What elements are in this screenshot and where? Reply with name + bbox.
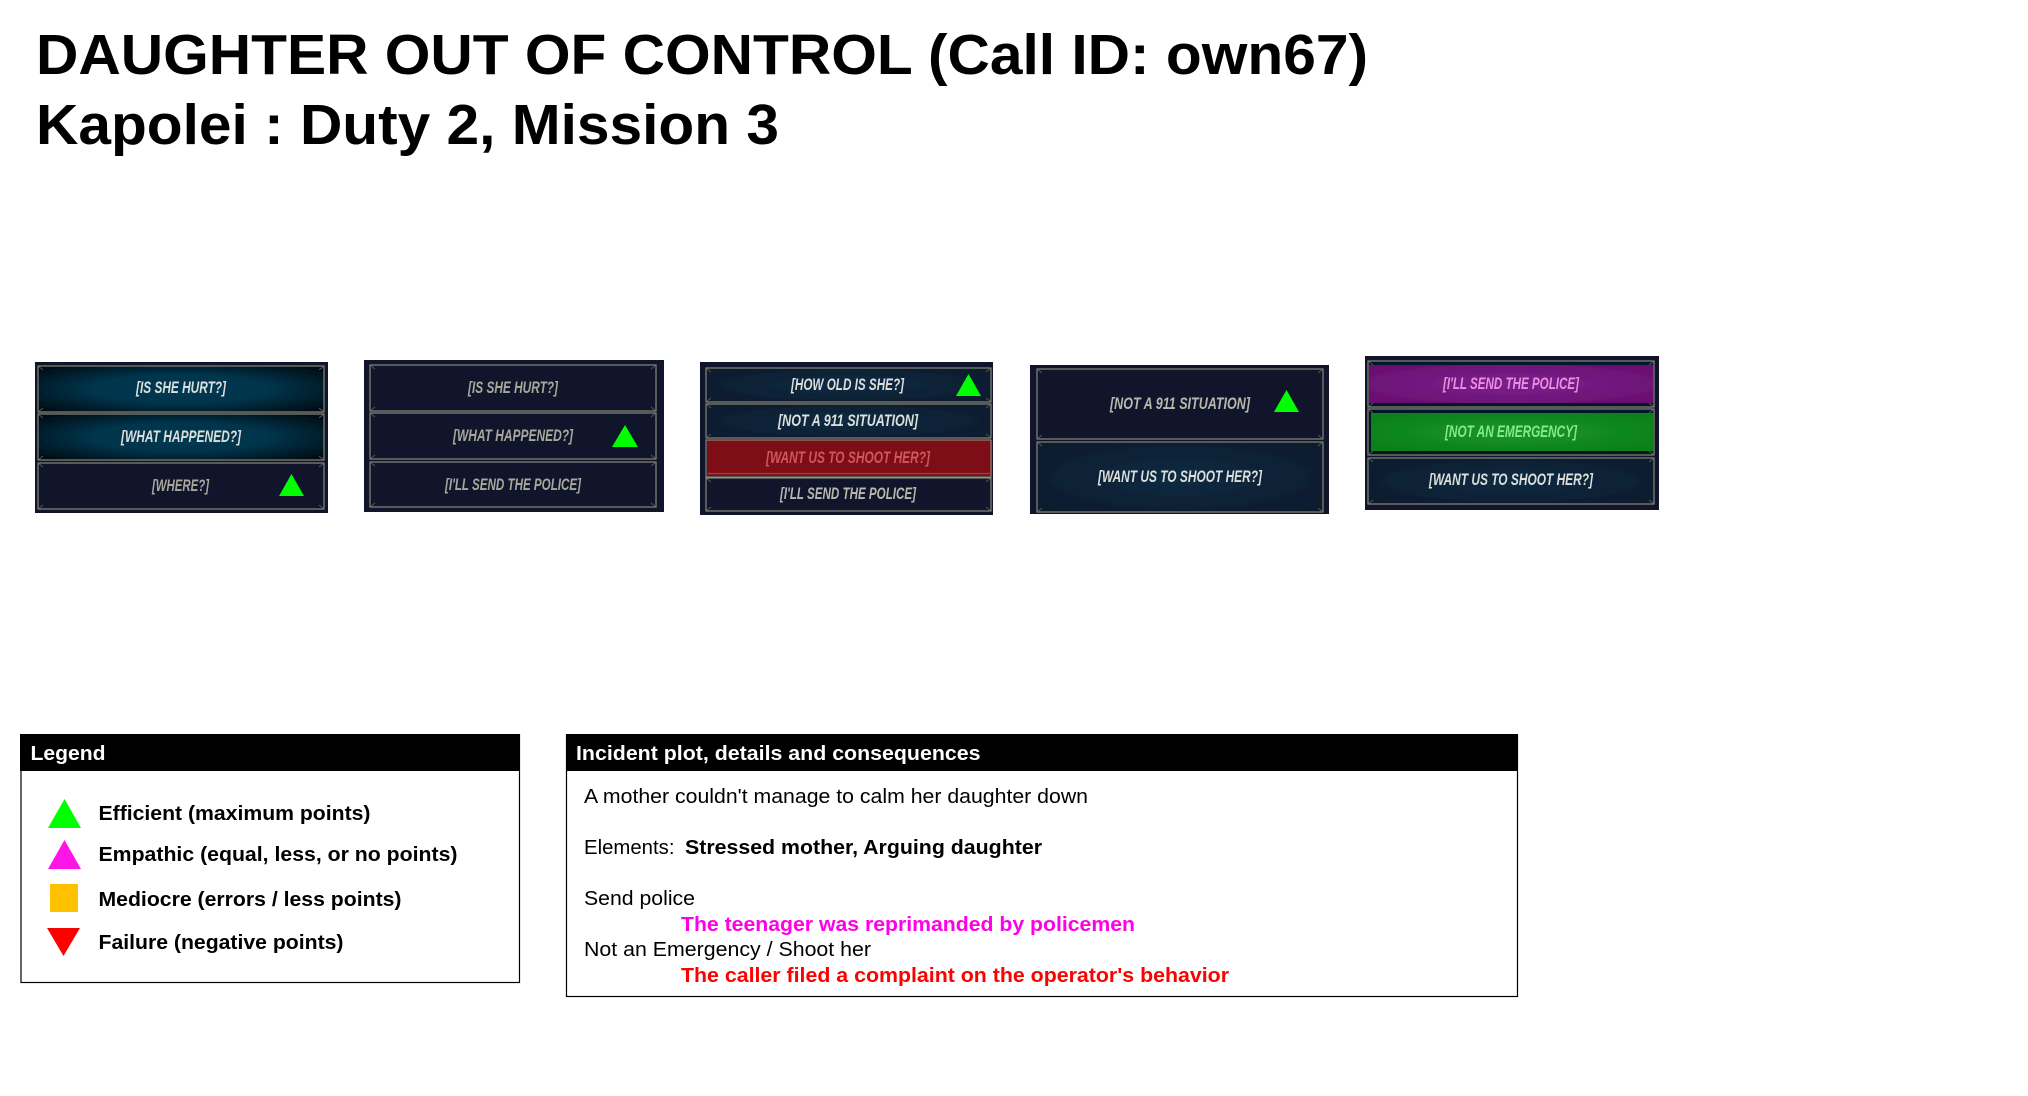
panel: dialogue options step 5 bbox=[1365, 356, 1659, 510]
outcome: send police: The teenager was reprimanded by policemen bbox=[681, 914, 1135, 936]
icon: efficient triangle bbox=[956, 374, 981, 396]
option: send the police, purple bbox=[1368, 361, 1654, 407]
panel: dialogue options step 4 bbox=[1030, 365, 1329, 514]
legend item: efficient bbox=[48, 799, 370, 828]
outcome: not an emergency or shoot her: The caller filed a complaint on the operator's behavior bbox=[681, 965, 1229, 987]
title: DAUGHTER OUT OF CONTROL (Call ID: own67) bbox=[36, 23, 1368, 87]
option: where bbox=[38, 463, 324, 509]
option: want us to shoot her: [WANT US TO SHOOT HER?] bbox=[1428, 470, 1594, 489]
option: send the police, purple: [I'LL SEND THE POLICE] bbox=[1442, 374, 1580, 393]
option: is she hurt bbox=[370, 365, 656, 411]
option: how old is she bbox=[706, 368, 991, 402]
option: what happened bbox=[370, 413, 656, 459]
legend item: efficient: Efficient (maximum points) bbox=[98, 803, 370, 825]
legend item: failure bbox=[47, 928, 344, 956]
panel: dialogue options step 1 bbox=[35, 362, 328, 513]
option: what happened bbox=[38, 414, 324, 460]
option: send the police: [I'LL SEND THE POLICE] bbox=[779, 484, 917, 503]
outcome: send police: Send police bbox=[584, 888, 695, 910]
icon: efficient triangle bbox=[612, 425, 638, 447]
legend item: failure: Failure (negative points) bbox=[98, 932, 344, 954]
icon: efficient triangle bbox=[279, 474, 304, 496]
outcome: not an emergency or shoot her: Not an Emergency / Shoot her bbox=[584, 939, 871, 961]
panel: dialogue options step 3 bbox=[700, 362, 993, 515]
option: send the police: [I'LL SEND THE POLICE] bbox=[444, 475, 582, 494]
option: not a 911 situation: [NOT A 911 SITUATION] bbox=[777, 411, 919, 430]
incident heading: Incident plot, details and consequences bbox=[576, 743, 980, 765]
legend item: empathic bbox=[48, 840, 458, 869]
outcome: send police bbox=[584, 888, 1135, 936]
legend item: mediocre bbox=[50, 884, 402, 912]
title bbox=[36, 23, 1368, 157]
outcome: not an emergency or shoot her bbox=[584, 939, 1229, 987]
option: want us to shoot her, selected: [WANT US TO SHOOT HER?] bbox=[765, 448, 931, 467]
option: what happened: [WHAT HAPPENED?] bbox=[120, 427, 242, 446]
incident heading bbox=[566, 734, 1518, 771]
option: want us to shoot her bbox=[1368, 458, 1654, 504]
legend item: mediocre: Mediocre (errors / less points) bbox=[98, 889, 402, 911]
legend heading: Legend bbox=[30, 743, 106, 765]
elements: Elements: bbox=[584, 837, 674, 859]
option: is she hurt: [IS SHE HURT?] bbox=[135, 378, 227, 397]
panel: legend bbox=[20, 734, 520, 982]
legend heading bbox=[20, 734, 520, 771]
option: what happened: [WHAT HAPPENED?] bbox=[452, 426, 574, 445]
option: is she hurt: [IS SHE HURT?] bbox=[467, 378, 559, 397]
option: want us to shoot her, selected bbox=[706, 440, 992, 477]
legend item: empathic: Empathic (equal, less, or no points) bbox=[98, 844, 458, 866]
option: not an emergency, green bbox=[1368, 409, 1654, 455]
icon: efficient triangle bbox=[1274, 390, 1299, 412]
option: not an emergency, green: [NOT AN EMERGENCY] bbox=[1444, 422, 1578, 441]
option: not a 911 situation: [NOT A 911 SITUATION] bbox=[1109, 394, 1251, 413]
panel: incident plot, details and consequences bbox=[566, 734, 1518, 996]
option: want us to shoot her: [WANT US TO SHOOT HER?] bbox=[1097, 467, 1263, 486]
option: want us to shoot her bbox=[1037, 442, 1323, 512]
option: is she hurt bbox=[38, 366, 324, 412]
option: how old is she: [HOW OLD IS SHE?] bbox=[790, 375, 905, 394]
title: Kapolei : Duty 2, Mission 3 bbox=[36, 93, 779, 157]
option: send the police bbox=[370, 462, 656, 507]
elements: Stressed mother, Arguing daughter bbox=[685, 837, 1042, 859]
option: where: [WHERE?] bbox=[151, 476, 210, 495]
option: send the police bbox=[706, 478, 991, 511]
panel: dialogue options step 2 bbox=[364, 360, 664, 512]
plot summary: A mother couldn't manage to calm her daughter down bbox=[584, 786, 1088, 808]
option: not a 911 situation bbox=[706, 404, 991, 438]
option: not a 911 situation bbox=[1037, 369, 1323, 439]
